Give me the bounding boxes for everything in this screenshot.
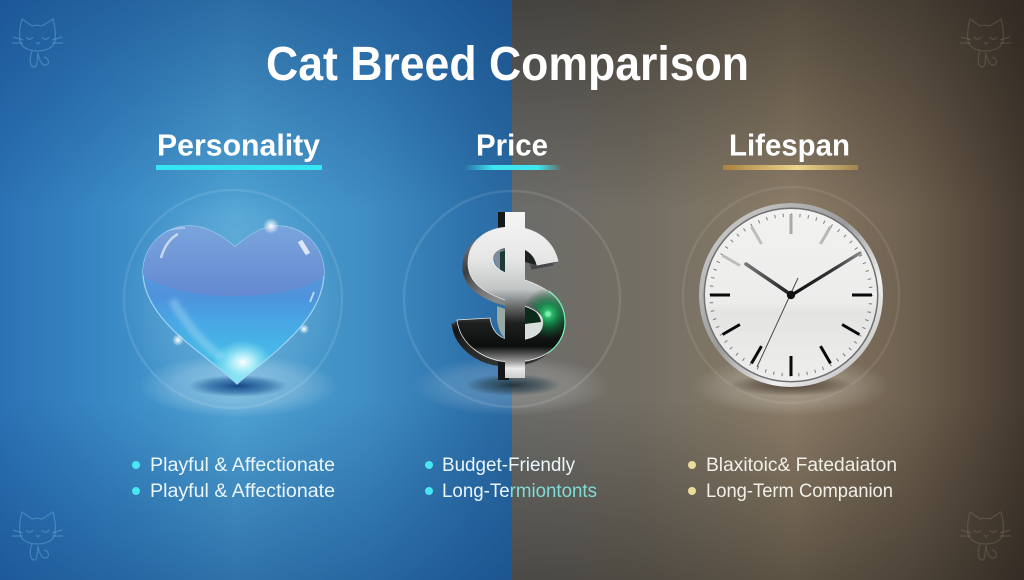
- dollar front face: [457, 212, 565, 378]
- list: personality: Playful & Affectionate: [150, 481, 335, 502]
- dollar counter details: [494, 249, 543, 340]
- heading: personality: Personality: [157, 128, 321, 162]
- icon: cat bottom right: [960, 512, 1011, 560]
- icon: cat top left: [12, 19, 63, 67]
- icon: cat bottom left: [12, 512, 63, 560]
- heading: price: Price: [476, 128, 548, 162]
- icon: glass heart: [121, 187, 345, 418]
- icon: wall clock: [683, 187, 899, 416]
- title: Cat Breed Comparison: [266, 38, 749, 91]
- heading: lifespan: Lifespan: [729, 128, 850, 162]
- list: price: [425, 455, 597, 502]
- hour ticks: [710, 214, 872, 376]
- list: personality: [132, 455, 335, 502]
- list: personality: Playful & Affectionate: [150, 455, 335, 476]
- clock face: [705, 209, 877, 381]
- list: lifespan: Blaxitoic& Fatedaiaton: [706, 455, 897, 476]
- heading: price: [464, 128, 562, 170]
- clock rim: [699, 203, 883, 387]
- list: price: Long-Termiontonts: [442, 481, 597, 502]
- background: left blue half: [0, 0, 512, 580]
- minute ticks: [711, 215, 871, 375]
- list: lifespan: [688, 455, 897, 502]
- icon: metallic dollar sign: [404, 191, 620, 416]
- list: lifespan: Long-Term Companion: [706, 481, 893, 502]
- clock hands: [746, 264, 787, 292]
- list: price: Budget-Friendly: [442, 455, 575, 476]
- icon: cat top right: [960, 19, 1011, 67]
- background: right taupe half: [512, 0, 1024, 580]
- dollar extrusion: [452, 212, 562, 380]
